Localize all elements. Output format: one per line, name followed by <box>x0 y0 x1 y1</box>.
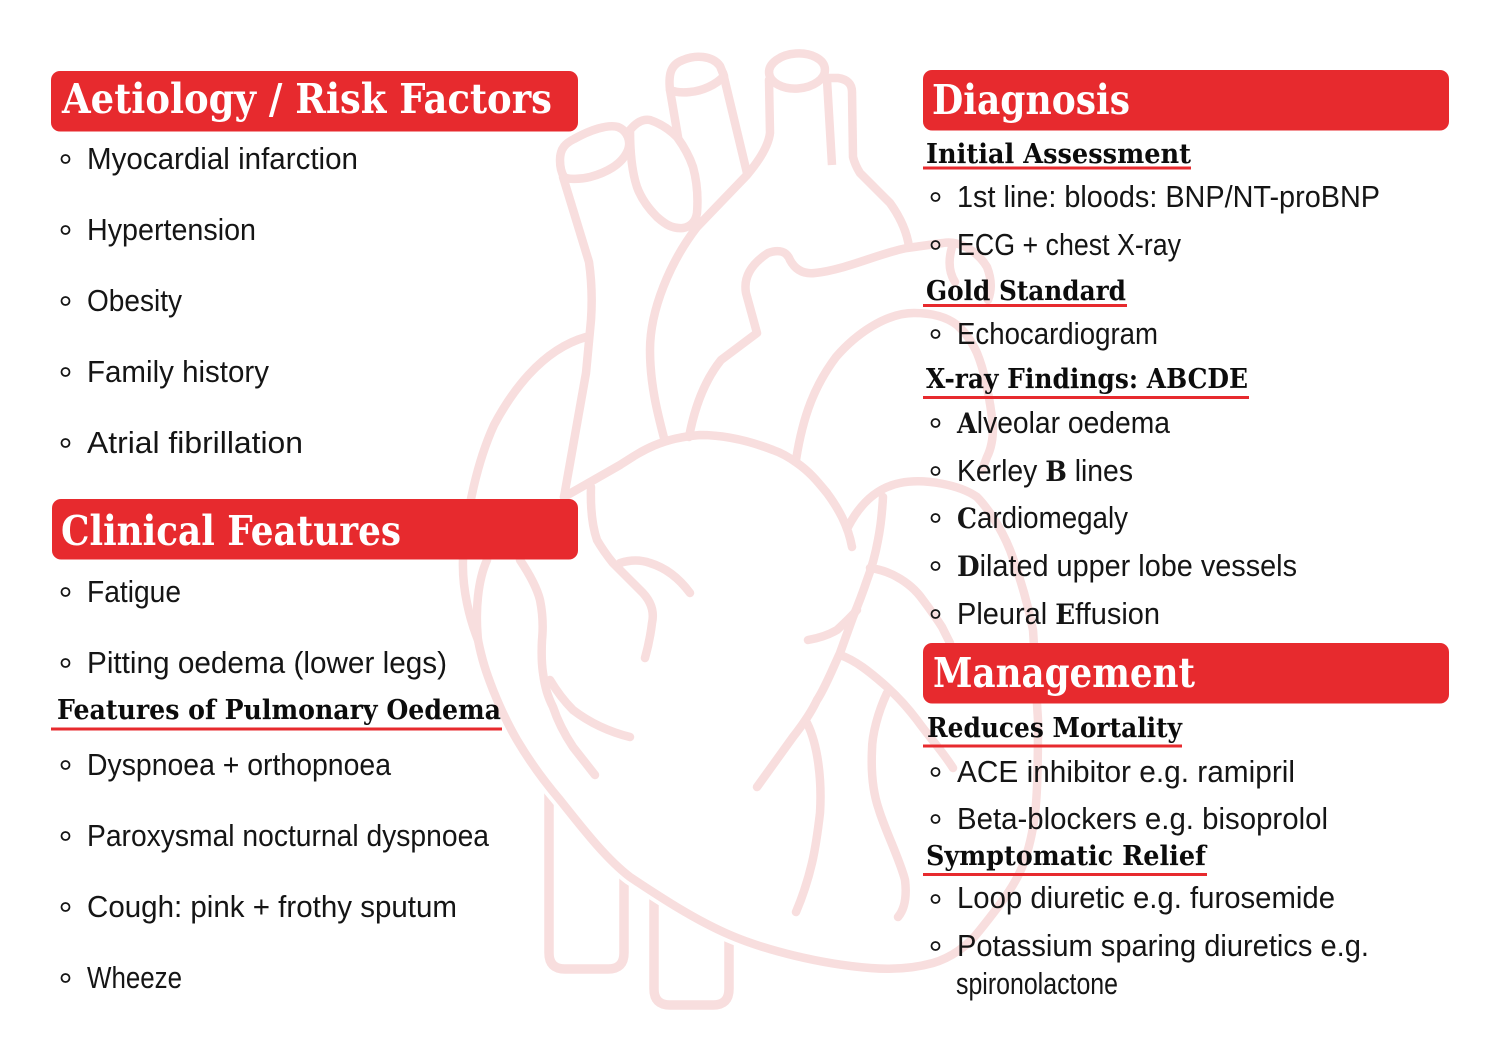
panel: Diagnosis <box>923 70 1449 631</box>
heading: Management <box>923 643 1449 704</box>
list: symptomatic relief: spironolactone <box>956 966 1118 1001</box>
subheading: Symptomatic Relief: Symptomatic Relief <box>926 841 1208 872</box>
list: x-ray findings: Alveolar oedema <box>956 405 1171 440</box>
list: risk factors: Obesity <box>87 283 182 318</box>
list: gold standard: Echocardiogram <box>957 316 1158 351</box>
list: pulmonary oedema features <box>62 747 490 995</box>
list: risk factors: Atrial fibrillation <box>87 425 303 460</box>
list: risk factors <box>62 141 358 460</box>
heading: Diagnosis <box>923 70 1449 130</box>
heading: Diagnosis: Diagnosis <box>932 76 1130 124</box>
list: risk factors: Hypertension <box>87 212 256 247</box>
list: pulmonary oedema features: Wheeze <box>87 960 182 995</box>
list: clinical features: Pitting oedema (lower legs) <box>87 645 447 680</box>
list: reduces mortality <box>932 754 1328 836</box>
list: risk factors: Family history <box>87 354 269 389</box>
heading: Management: Management <box>933 649 1195 697</box>
heading: Clinical Features <box>52 499 578 560</box>
subheading: Features of Pulmonary Oedema: Features of Pulmonary Oedema <box>57 695 501 726</box>
list: initial assessment: ECG + chest X-ray <box>957 227 1181 262</box>
subheading: Initial Assessment: Initial Assessment <box>926 139 1191 170</box>
list: symptomatic relief: Potassium sparing diuretics e.g. <box>957 928 1369 963</box>
list: x-ray findings: Kerley B lines <box>957 453 1133 488</box>
panel: Aetiology / Risk Factors <box>51 71 578 460</box>
list: symptomatic relief <box>932 880 1369 1001</box>
list: x-ray findings: Cardiomegaly <box>957 500 1128 535</box>
list: x-ray findings: Pleural Effusion <box>957 596 1160 631</box>
panel: Clinical Features <box>51 499 578 995</box>
list: symptomatic relief: Loop diuretic e.g. furosemide <box>957 880 1335 915</box>
list: x-ray findings: Dilated upper lobe vessels <box>957 548 1297 583</box>
list: reduces mortality: Beta-blockers e.g. bisoprolol <box>957 801 1328 836</box>
list: risk factors: Myocardial infarction <box>87 141 358 176</box>
list: initial assessment <box>932 179 1380 262</box>
list: initial assessment: 1st line: bloods: BNP/NT-proBNP <box>957 179 1380 214</box>
list: x-ray findings <box>932 405 1297 631</box>
list: clinical features <box>62 574 447 680</box>
heart outline background illustration <box>463 52 1038 1005</box>
list: clinical features: Fatigue <box>87 574 181 609</box>
heading: Aetiology / Risk Factors: Aetiology / Risk Factors <box>61 75 552 123</box>
subheading: X-ray Findings: ABCDE: X-ray Findings: ABCDE <box>926 364 1248 395</box>
list: reduces mortality: ACE inhibitor e.g. ramipril <box>957 754 1295 789</box>
list: pulmonary oedema features: Dyspnoea + orthopnoea <box>87 747 392 782</box>
panel: Management <box>923 643 1449 1001</box>
heading: Clinical Features: Clinical Features <box>61 507 401 555</box>
subheading: Gold Standard: Gold Standard <box>926 276 1126 307</box>
list: pulmonary oedema features: Paroxysmal nocturnal dyspnoea <box>87 818 490 853</box>
subheading: Reduces Mortality: Reduces Mortality <box>927 713 1183 744</box>
list: pulmonary oedema features: Cough: pink + frothy sputum <box>87 889 457 924</box>
